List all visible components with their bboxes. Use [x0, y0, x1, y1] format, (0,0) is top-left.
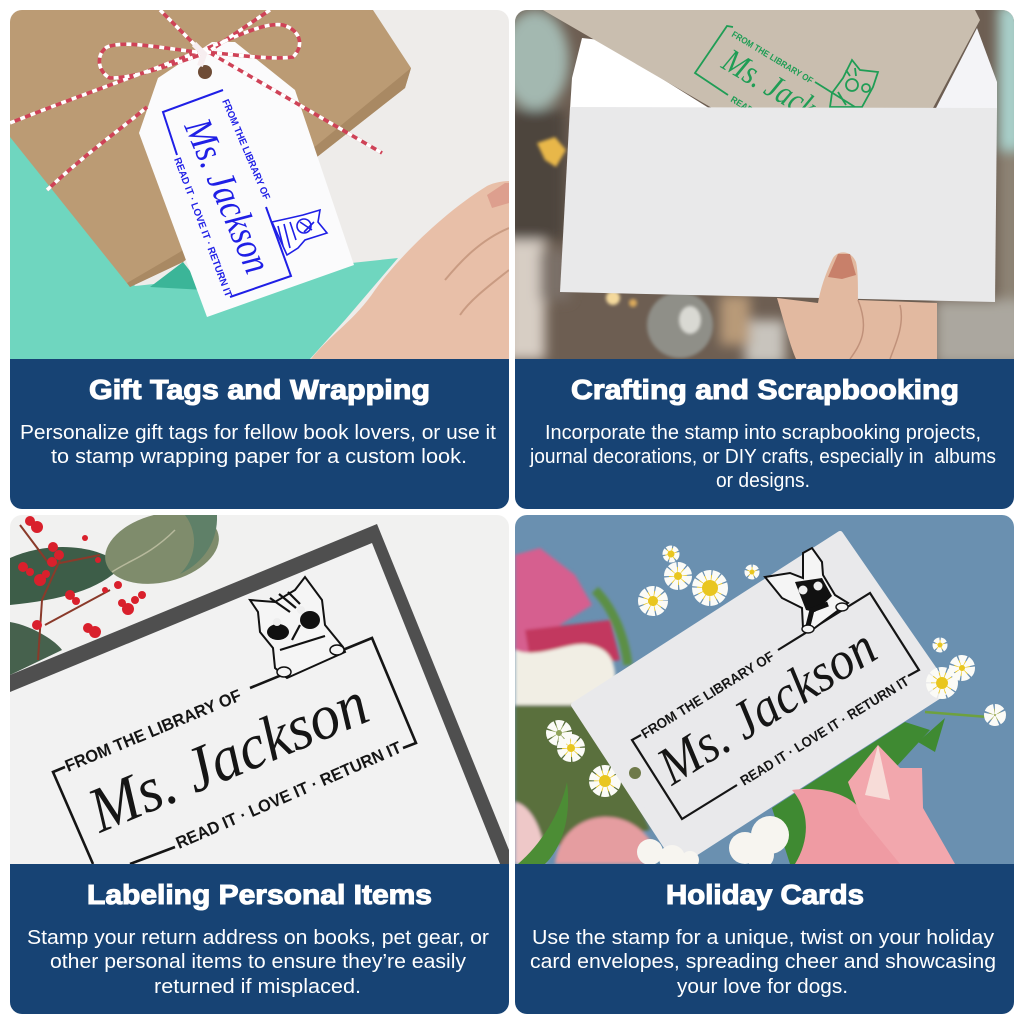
hand	[777, 252, 937, 359]
body text: other personal items to ensure they’re easily	[50, 951, 466, 973]
heading: Labeling Personal Items	[87, 879, 432, 910]
body text: Personalize gift tags for fellow book lovers, or use it	[20, 422, 496, 444]
photo: envelope with stamped card	[501, 5, 1024, 365]
body text: to stamp wrapping paper for a custom look.	[51, 446, 467, 468]
icon: cat	[250, 577, 345, 678]
body text: Stamp your return address on books, pet gear, or	[27, 927, 489, 949]
stamp impression: Ms. Jackson	[715, 42, 857, 147]
flowers in front of card	[637, 640, 1001, 871]
stamp impression: READ IT · LOVE IT · RETURN IT	[729, 94, 846, 170]
photo: card in bouquet	[515, 515, 1014, 871]
body text: your love for dogs.	[677, 976, 848, 998]
twine	[10, 10, 382, 190]
caption panel	[10, 864, 509, 1014]
heading: Crafting and Scrapbooking	[571, 374, 959, 405]
caption panel	[515, 864, 1014, 1014]
panel: holiday cards	[515, 515, 1014, 1014]
card	[574, 534, 948, 864]
body text	[529, 422, 996, 492]
body text: journal decorations, or DIY crafts, especially in albums	[529, 446, 996, 468]
stamp impression: Ms. Jackson	[77, 667, 378, 846]
icon: cat	[272, 210, 327, 255]
card: FROM THE LIBRARY OF	[638, 648, 777, 742]
body text: or designs.	[716, 470, 810, 492]
body text	[20, 422, 496, 468]
body text: Use the stamp for a unique, twist on your holiday	[532, 927, 994, 949]
foliage	[10, 515, 219, 675]
photo: stamped book cover	[10, 501, 509, 864]
panel: gift tags and wrapping	[10, 10, 509, 509]
stamp impression: FROM THE LIBRARY OF	[730, 29, 815, 86]
card: READ IT · LOVE IT · RETURN IT	[737, 673, 912, 789]
panel: labeling personal items	[10, 501, 509, 1014]
body text: card envelopes, spreading cheer and showcasing	[530, 951, 996, 973]
hand	[311, 181, 509, 359]
stamp impression: FROM THE LIBRARY OF	[62, 686, 244, 776]
panel: crafting and scrapbooking	[501, 5, 1024, 509]
icon: cat	[830, 60, 878, 107]
stamp impression: READ IT · LOVE IT · RETURN IT	[173, 738, 405, 853]
bouquet	[515, 548, 988, 864]
heading: Gift Tags and Wrapping	[89, 374, 430, 405]
heading: Holiday Cards	[666, 879, 864, 910]
gift tag	[139, 42, 354, 317]
gift tag: READ IT · LOVE IT · RETURN IT	[171, 156, 233, 299]
body text: returned if misplaced.	[154, 976, 361, 998]
body text: Incorporate the stamp into scrapbooking projects,	[545, 422, 981, 444]
body text	[27, 927, 489, 998]
daisies: back	[551, 567, 723, 792]
stamp impression	[694, 25, 880, 108]
body text	[530, 927, 996, 998]
photo: gift tag on wrapped box	[10, 10, 509, 359]
gift tag: FROM THE LIBRARY OF	[219, 98, 272, 202]
gift tag: Ms. Jackson	[175, 111, 281, 280]
card: Ms. Jackson	[646, 616, 887, 797]
caption panel	[515, 359, 1014, 509]
caption panel	[10, 359, 509, 509]
icon: cat	[765, 548, 848, 633]
